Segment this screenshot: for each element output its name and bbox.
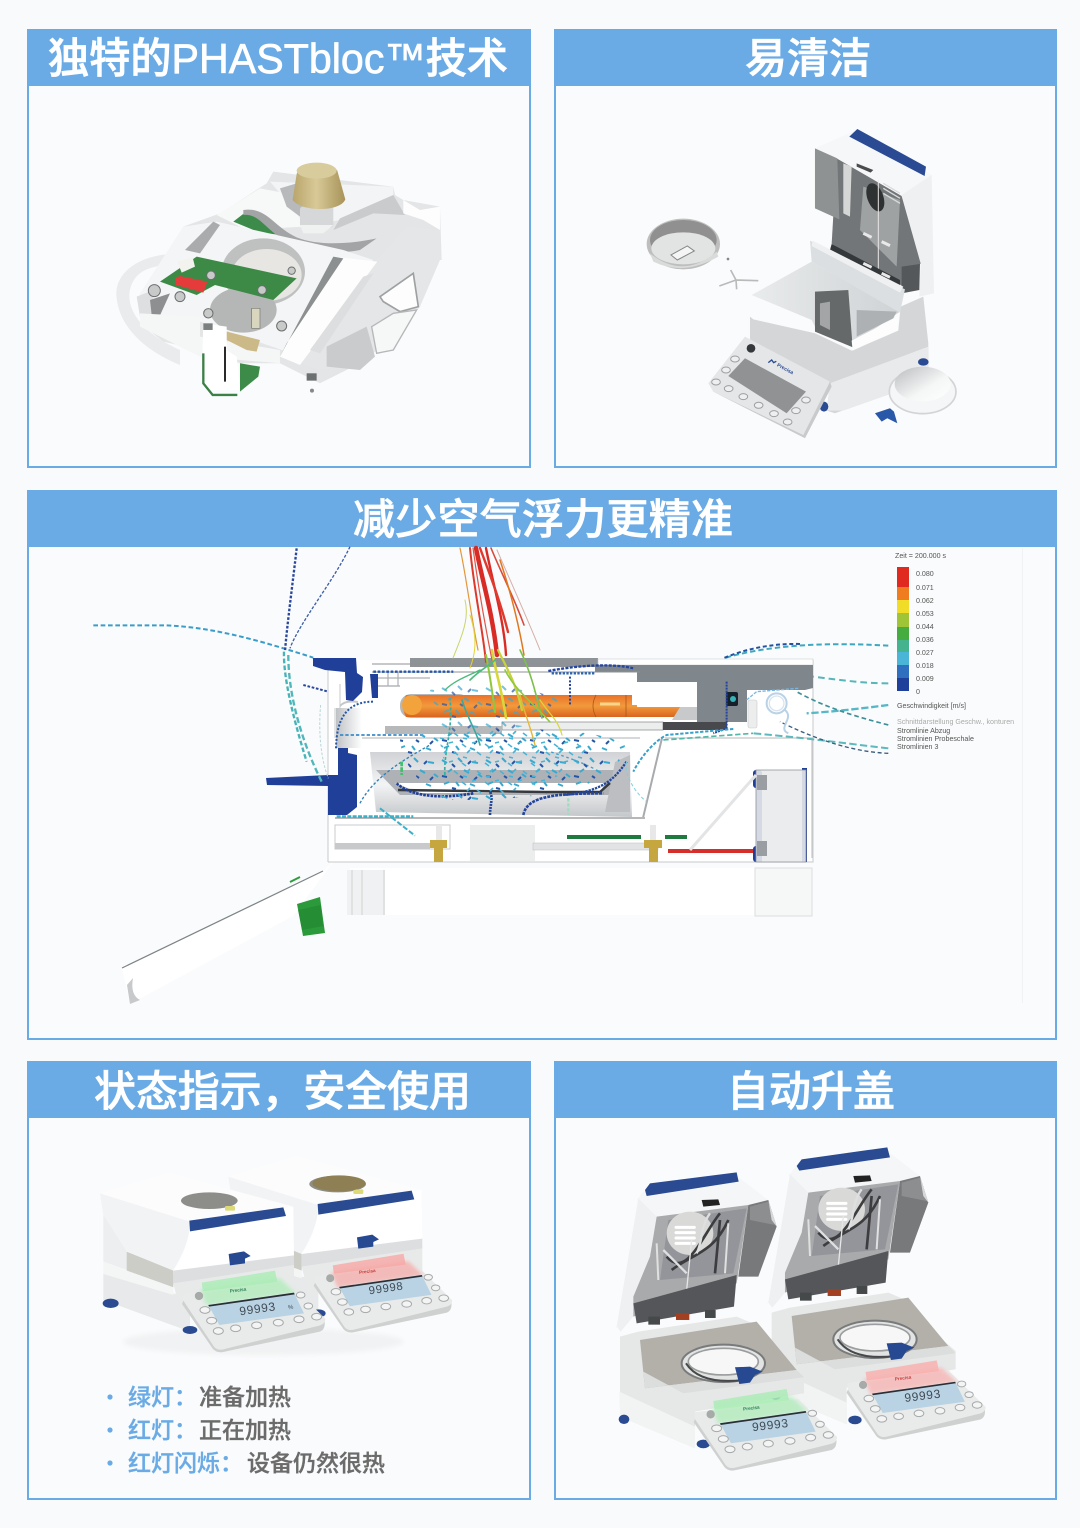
legend: velocity colour scale: Schnittdarstellung Geschw., konturen — [897, 718, 1014, 726]
right analyser, red light — [228, 1156, 452, 1333]
bullet: green light — [107, 1384, 291, 1410]
legend: velocity colour scale: 0.071 — [916, 584, 934, 592]
bullet: red light: 正在加热 — [199, 1417, 291, 1443]
bullet list: light meaning — [107, 1384, 385, 1476]
bullet: red light — [107, 1417, 291, 1443]
legend: velocity colour scale — [895, 552, 1014, 751]
bullet: blinking red light — [107, 1450, 385, 1476]
legend: velocity colour scale: Stromlinien Probeschale — [897, 735, 974, 743]
streamlines: left side — [93, 547, 473, 836]
streamlines: right side — [490, 644, 888, 815]
legend: velocity colour scale: Geschwindigkeit [m/s] — [897, 702, 966, 710]
base and fasteners — [335, 690, 806, 862]
legend: velocity colour scale: Stromlinien 3 — [897, 743, 938, 751]
heading: 状态指示，安全使用 — [94, 1068, 471, 1115]
illustration: PHASTbloc weighing cell — [116, 163, 442, 395]
heading: 易清洁 — [745, 35, 871, 82]
bullet: blinking red light: 红灯闪烁： — [128, 1450, 243, 1476]
right analyser, red light: Precisa — [894, 1375, 912, 1382]
panel: less air buoyancy, more accurate — [27, 490, 1057, 1039]
sample chamber — [335, 738, 812, 858]
orange heater tube — [400, 682, 697, 720]
heading: 独特的PHASTbloc™技术 — [48, 35, 508, 82]
right analyser, red light: 99998 — [368, 1281, 404, 1297]
legend: velocity colour scale: 0.036 — [916, 636, 934, 644]
legend: velocity colour scale: 0.080 — [916, 570, 934, 578]
colour bar — [897, 567, 909, 691]
panel: easy to clean — [554, 29, 1057, 467]
illustration: two analysers with raised lids — [615, 1147, 985, 1471]
blue frame parts — [266, 658, 807, 862]
panel: unique PHASTbloc technology — [27, 29, 531, 467]
chart: airflow simulation cross-section — [93, 547, 888, 1004]
illustration: two closed analysers with status lights — [100, 1156, 452, 1355]
panel frame — [28, 491, 1056, 1039]
legend: velocity colour scale: 0.062 — [916, 597, 934, 605]
legend: velocity colour scale: 0.018 — [916, 662, 934, 670]
heading — [27, 490, 1057, 547]
heading — [554, 1061, 1057, 1118]
heading — [554, 29, 1057, 86]
heading — [27, 1061, 531, 1118]
operating arm and green knob — [122, 862, 333, 1004]
left analyser, green light: Precisa — [229, 1287, 247, 1294]
right analyser, red light — [767, 1147, 985, 1440]
bullet: red light: 红灯： — [128, 1417, 197, 1443]
left analyser, green light — [100, 1173, 325, 1352]
legend: velocity colour scale: Stromlinie Abzug — [897, 727, 950, 735]
left analyser, green light: 99993 — [238, 1299, 277, 1318]
panel frame — [28, 1062, 530, 1499]
legend: velocity colour scale: 0 — [916, 688, 920, 696]
bullet: blinking red light: 设备仍然很热 — [247, 1450, 385, 1476]
heading: 自动升盖 — [727, 1068, 895, 1115]
streamlines: central particle cloud — [400, 683, 625, 800]
panel frame — [555, 30, 1056, 467]
panel frame — [28, 30, 530, 467]
legend: velocity colour scale: 0.044 — [916, 623, 934, 631]
bullet: green light: 准备加热 — [199, 1384, 291, 1410]
right analyser, red light: Precisa — [359, 1268, 376, 1275]
right analyser, red light: 99993 — [904, 1387, 942, 1405]
legend: velocity colour scale: 0.009 — [916, 675, 934, 683]
legend: velocity colour scale: Zeit = 200.000 s — [895, 552, 947, 560]
heading: 减少空气浮力更精准 — [353, 496, 733, 543]
left analyser, green light: 99993 — [751, 1416, 789, 1434]
legend: velocity colour scale: 0.027 — [916, 649, 934, 657]
panel: automatic lid lift — [554, 1061, 1057, 1499]
illustration: disassembled analyser — [647, 129, 956, 438]
bullet: green light: 绿灯： — [128, 1384, 197, 1410]
left analyser, green light: Precisa — [743, 1405, 760, 1412]
left analyser, green light: % — [288, 1305, 295, 1311]
panel frame — [555, 1062, 1056, 1499]
panel: status indicator, safe use — [27, 1061, 531, 1499]
illustration: disassembled analyser: Precisa — [776, 362, 794, 376]
streamlines: rising hot air — [445, 548, 562, 745]
left analyser, green light — [615, 1172, 837, 1471]
instrument housing cross-section — [266, 658, 813, 916]
legend: velocity colour scale: 0.053 — [916, 610, 934, 618]
